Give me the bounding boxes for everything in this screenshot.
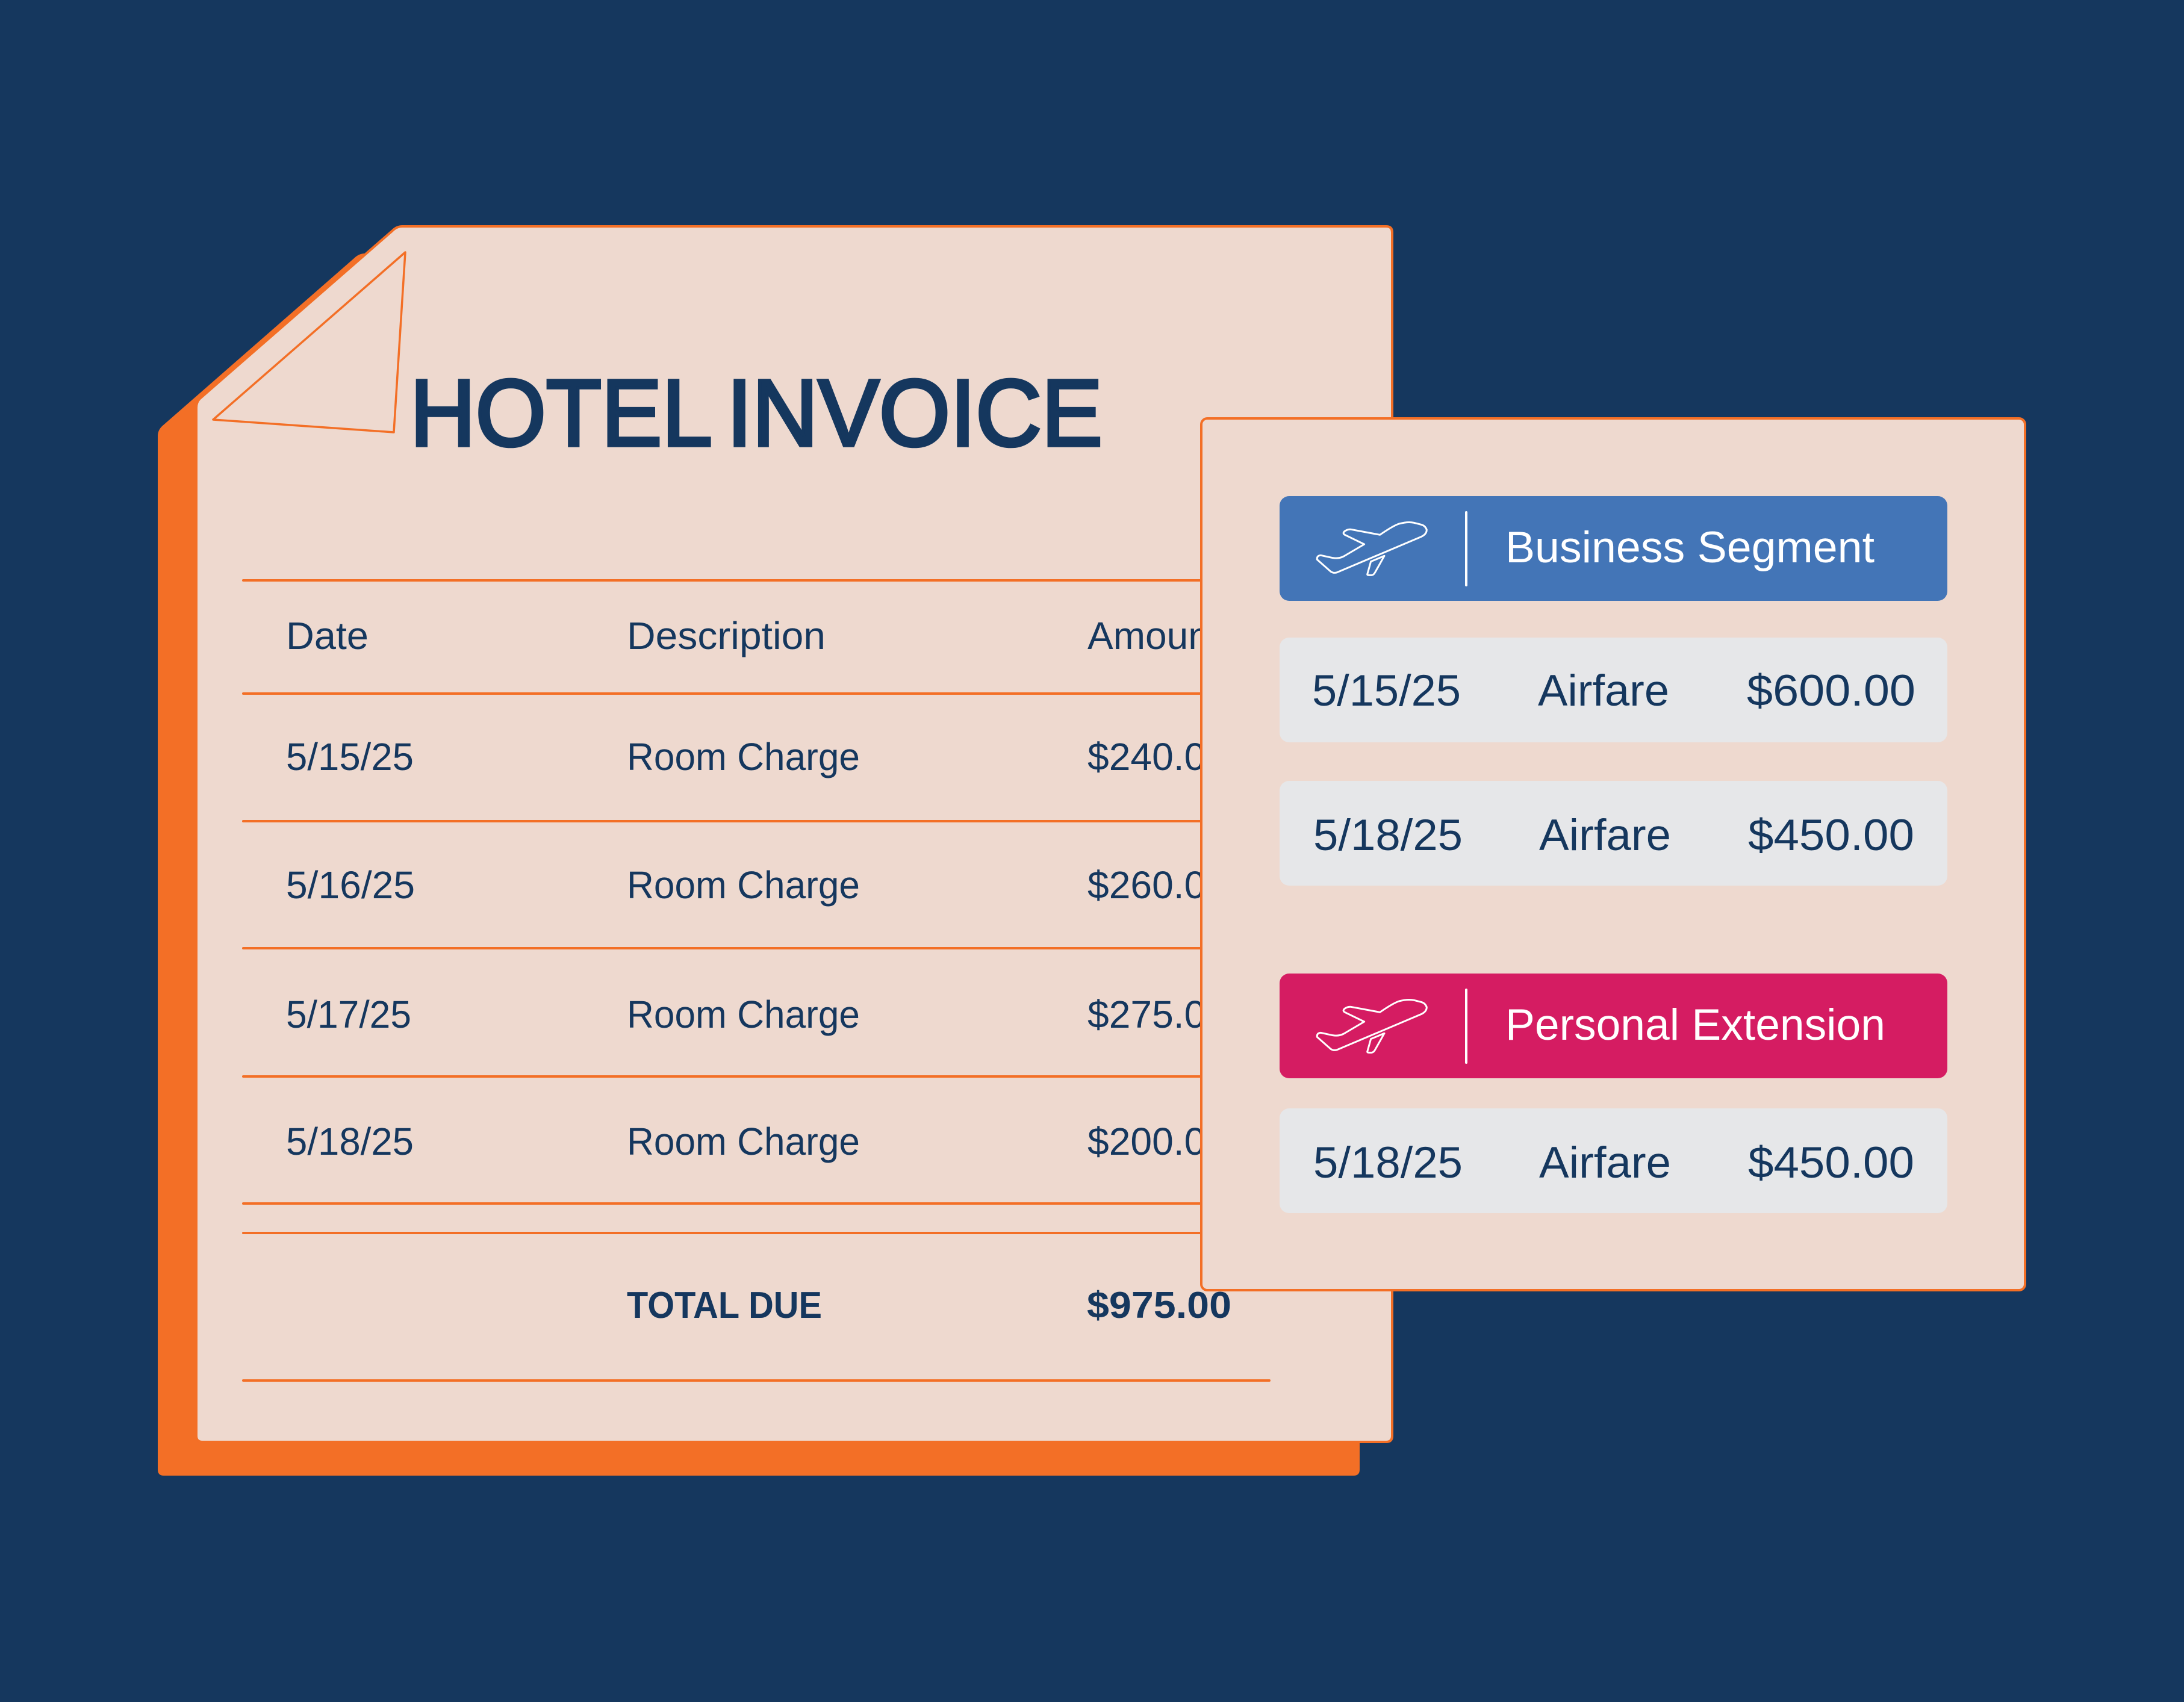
table header: Date [286,614,369,657]
row: 5/15/25: 5/15/25 [286,735,414,778]
airfare row 5/15/25: 5/15/25 [1312,666,1461,715]
airfare row 5/18/25 [1280,781,1947,886]
title [410,361,1103,466]
icon: airplane [1317,999,1426,1052]
page sheet [196,226,1392,1442]
back page shadow [158,253,1360,1476]
icon: airplane [1317,522,1426,575]
row: 5/16/25: 5/16/25 [286,863,415,907]
personal extension header [1280,974,1947,1078]
row: 5/18/25 [286,1120,1227,1163]
airfare row personal 5/18/25: Airfare [1539,1138,1671,1187]
airfare row personal 5/18/25: 5/18/25 [1313,1138,1463,1187]
table header [286,614,1221,657]
airfare row personal 5/18/25 [1280,1108,1947,1213]
row: 5/16/25: Room Charge [627,863,860,907]
row: 5/17/25 [286,993,1227,1036]
airfare row personal 5/18/25: $450.00 [1748,1138,1914,1187]
title: INVOICE [727,361,1103,466]
business segment header: Business Segment [1505,523,1874,572]
personal extension header: Personal Extension [1505,1001,1885,1049]
total due [627,1285,1231,1326]
total due: $975.00 [1087,1285,1231,1326]
airfare row 5/18/25: Airfare [1539,811,1671,860]
airfare row 5/18/25: 5/18/25 [1313,811,1463,860]
table rules [243,580,1269,1381]
row: 5/17/25: $275.00 [1087,993,1227,1036]
total due: TOTAL DUE [627,1285,822,1326]
row: 5/16/25: $260.00 [1087,863,1227,907]
row: 5/16/25 [286,863,1227,907]
row: 5/15/25: Room Charge [627,735,860,778]
row: 5/15/25 [286,735,1227,778]
card background [1201,418,2025,1290]
table header: Description [627,614,826,657]
row: 5/18/25: $200.00 [1087,1120,1227,1163]
airfare row 5/15/25: Airfare [1538,666,1669,715]
row: 5/17/25: 5/17/25 [286,993,411,1036]
row: 5/15/25: $240.00 [1087,735,1227,778]
airfare row 5/15/25: $600.00 [1747,666,1915,715]
panel: hotel invoice page [196,226,1392,1442]
row: 5/18/25: 5/18/25 [286,1120,414,1163]
table header: Amount [1087,614,1221,657]
airfare row 5/18/25: $450.00 [1748,811,1914,860]
folded corner [213,252,405,432]
row: 5/17/25: Room Charge [627,993,860,1036]
title: HOTEL [410,361,712,466]
row: 5/18/25: Room Charge [627,1120,860,1163]
airfare row 5/15/25 [1280,638,1947,742]
business segment header [1280,496,1947,601]
panel: airfare card [1201,418,2025,1290]
